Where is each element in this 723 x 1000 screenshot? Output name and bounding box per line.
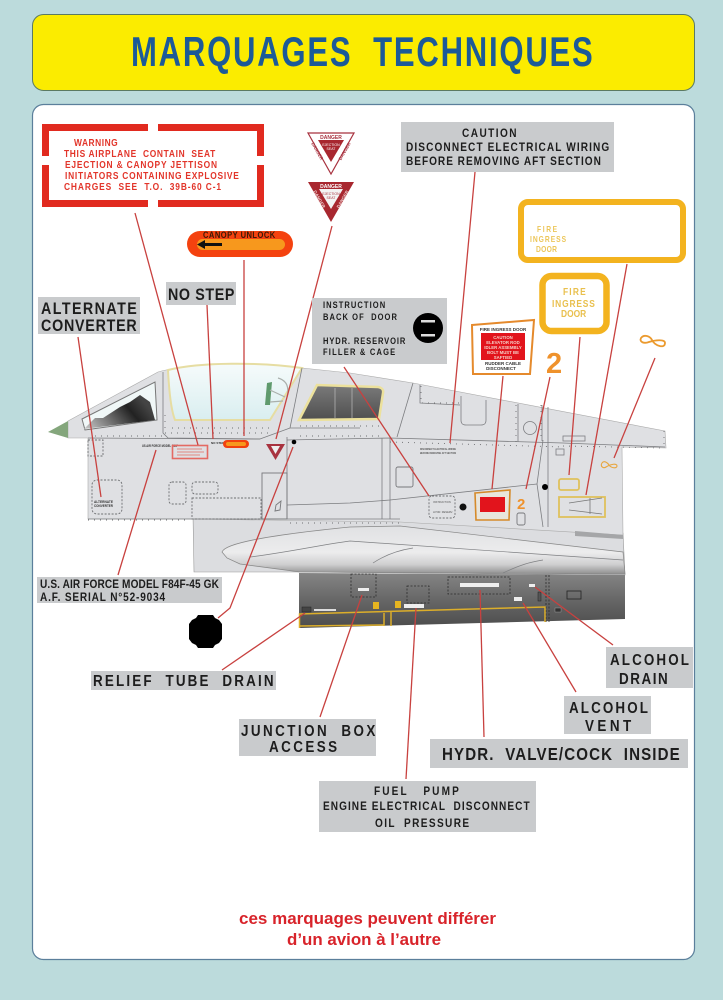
wing panel lines — [250, 541, 623, 573]
label: fuel pump: FUEL PUMP — [374, 785, 459, 798]
under fuselage panels — [351, 574, 549, 622]
danger triangle red: SEAT — [327, 196, 336, 200]
orange number 2: 2 — [546, 348, 562, 380]
small fire ingress door placard: DOOR — [561, 308, 586, 319]
fuselage — [68, 365, 666, 535]
label: instruction: INSTRUCTION — [323, 299, 385, 310]
label: junction box access — [239, 719, 376, 756]
label: relief tube drain: RELIEF TUBE DRAIN — [93, 673, 274, 690]
fire ingress caution placard: ELEVATOR ROD — [486, 340, 520, 345]
footer note: d’un avion à l’autre — [287, 930, 441, 949]
warning placard: THIS AIRPLANE CONTAIN SEAT — [64, 148, 216, 159]
small fire ingress door placard — [542, 276, 606, 331]
warning placard: EJECTION & CANOPY JETTISON — [65, 159, 217, 170]
danger triangle white: DANGER — [338, 141, 352, 161]
danger triangle red: EJECTION — [322, 192, 340, 196]
label: caution: CAUTION — [462, 127, 517, 140]
danger triangle white: DANGER — [320, 135, 342, 141]
big fire ingress door placard — [521, 202, 683, 260]
warning placard — [42, 124, 264, 207]
footer note — [239, 909, 496, 949]
label: fuel pump: ENGINE ELECTRICAL DISCONNECT — [323, 800, 530, 813]
footer note: ces marquages peuvent différer — [239, 909, 496, 928]
ejection seat — [265, 378, 288, 405]
orange infinity mark — [641, 336, 665, 346]
label: alcohol drain: ALCOHOL — [610, 652, 689, 669]
label: alternate converter: CONVERTER — [41, 317, 137, 335]
label: alcohol drain: DRAIN — [619, 671, 668, 688]
mini black placard marks: DISCONNECT ELECTRICAL WIRING — [420, 447, 456, 451]
mini fire ingress placard — [475, 490, 510, 520]
mini black dots — [292, 440, 548, 510]
warning placard: INITIATORS CONTAINING EXPLOSIVE — [65, 170, 239, 181]
label: alcohol vent — [564, 696, 651, 735]
canopy unlock placard: CANOPY UNLOCK — [203, 229, 275, 240]
canopy — [168, 364, 302, 420]
mini number 2: 2 — [517, 496, 525, 513]
fire ingress caution placard — [472, 320, 534, 374]
mini black placard marks — [94, 441, 456, 514]
mini black placard marks: INSTRUCTION — [433, 500, 451, 504]
fire ingress caution placard: FIRE INGRESS DOOR — [480, 327, 527, 332]
title banner — [32, 14, 694, 90]
danger triangle white: EJECTION — [322, 143, 340, 147]
label: junction box access: JUNCTION BOX — [241, 723, 376, 740]
rear window — [299, 385, 383, 420]
big fire ingress door placard: INGRESS — [530, 234, 566, 244]
label: instruction: BACK OF DOOR — [323, 311, 397, 322]
panel lines — [88, 368, 665, 527]
label: caution — [401, 122, 614, 172]
mini infinity — [601, 462, 617, 468]
aft dark strip — [575, 531, 623, 539]
label: alcohol vent: VENT — [585, 718, 631, 735]
mini canopy unlock — [223, 440, 249, 448]
label: caution: BEFORE REMOVING AFT SECTION — [406, 155, 601, 168]
label: instruction: HYDR. RESERVOIR — [323, 335, 405, 346]
aircraft side view — [48, 364, 666, 628]
label: US Air Force model: U.S. AIR FORCE MODEL F84F-45 GK — [40, 578, 219, 591]
fire ingress caution placard: BOLT MUST BE — [487, 350, 519, 355]
danger triangle white — [308, 133, 354, 174]
big fire ingress door placard: FIRE — [537, 224, 557, 234]
mini fire doors — [559, 479, 605, 517]
lower fairing — [193, 515, 625, 575]
label: instruction — [312, 298, 447, 364]
yellow fuel tank outline — [300, 607, 545, 628]
danger triangle red: DANGER — [312, 190, 327, 210]
label: hydr valve — [430, 739, 688, 768]
warning placard: CHARGES SEE T.O. 39B-60 C-1 — [64, 181, 221, 192]
fire ingress caution placard: IDLER ASSEMBLY — [484, 345, 522, 350]
label: instruction: FILLER & CAGE — [323, 346, 396, 357]
icon: black octagon plug — [189, 615, 222, 648]
mini black placard marks: NO STEP — [211, 441, 224, 445]
label: caution: DISCONNECT ELECTRICAL WIRING — [406, 141, 609, 154]
warning placard: WARNING — [74, 137, 118, 148]
mini black placard marks: HYDR. RESERV. — [433, 510, 453, 514]
mini danger triangle — [266, 444, 285, 460]
access panels — [88, 440, 455, 519]
label: fuel pump: OIL PRESSURE — [375, 817, 469, 830]
label: US Air Force model: A.F. SERIAL N°52-9034 — [40, 591, 166, 604]
label: alternate converter — [38, 297, 140, 335]
fire ingress caution placard: RUDDER CABLE — [485, 361, 521, 366]
fire ingress caution placard: DISCONNECT — [486, 366, 516, 371]
fire ingress caution placard: SAFTIED — [494, 355, 512, 360]
label: no step: NO STEP — [168, 286, 234, 304]
mini black placard marks: ALTERNATE — [94, 500, 114, 504]
label: fuel pump — [319, 781, 536, 832]
windshield — [82, 382, 157, 430]
title: MARQUAGES TECHNIQUES — [131, 28, 593, 75]
wing — [222, 526, 625, 574]
label: alternate converter: ALTERNATE — [41, 300, 137, 318]
icon: black filler cap — [413, 313, 443, 343]
instrument coaming — [84, 395, 155, 429]
nose cone — [48, 421, 68, 438]
mini black placard marks: US AIR FORCE MODEL F84F — [142, 444, 179, 448]
rivet lines — [88, 386, 665, 523]
label: US Air Force model — [37, 577, 222, 604]
danger triangle white: DANGER — [310, 142, 325, 162]
label: junction box access: ACCESS — [269, 739, 337, 756]
label: alcohol vent: ALCOHOL — [569, 700, 648, 717]
fuselage doors — [262, 467, 525, 525]
big fire ingress door placard: DOOR — [536, 244, 558, 254]
label: alcohol drain — [606, 647, 693, 688]
danger triangle red — [308, 182, 354, 222]
danger triangle red: DANGER — [336, 189, 350, 209]
small fire ingress door placard: FIRE — [563, 286, 586, 297]
mini black placard marks: CONVERTER — [94, 504, 113, 508]
small fire ingress door placard: INGRESS — [552, 298, 595, 309]
fire ingress caution placard: CAUTION — [493, 335, 513, 340]
canopy unlock placard — [187, 229, 293, 257]
mini warning placard — [172, 446, 208, 458]
under fuselage — [299, 573, 625, 628]
label: hydr valve: HYDR. VALVE/COCK INSIDE — [442, 744, 680, 764]
under fuselage details — [302, 583, 581, 612]
danger triangle red: DANGER — [320, 184, 342, 190]
leader lines — [78, 172, 655, 779]
danger triangle white: SEAT — [327, 147, 336, 151]
main white panel — [32, 104, 694, 960]
mini black placard marks: BEFORE REMOVING AFT SECTION — [420, 451, 456, 455]
